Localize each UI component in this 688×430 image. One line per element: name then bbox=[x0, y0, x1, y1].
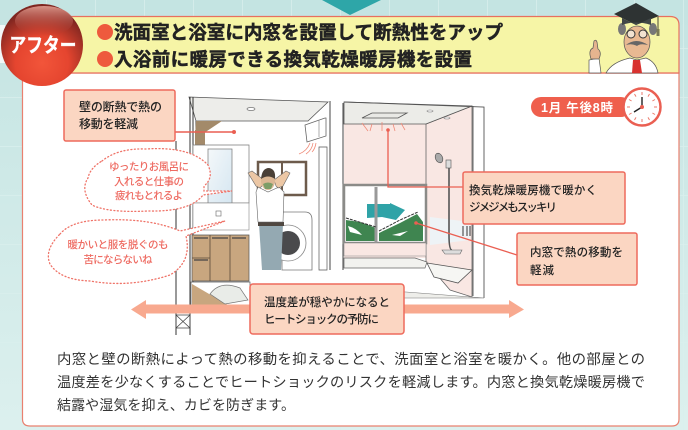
heading: header points bbox=[97, 22, 503, 70]
callout: ventilation heater bbox=[386, 128, 625, 224]
badge: after bbox=[1, 4, 83, 86]
callout: inner window bbox=[414, 221, 637, 285]
speech bubble: warm when undressing: 暖かいと服を脱ぐのも bbox=[68, 238, 168, 251]
callout: heat shock prevention: ヒートショックの予防に bbox=[264, 312, 379, 326]
text block: description: 内窓と壁の断熱によって熱の移動を抑えることで、洗面室と浴室を暖かく。他の部屋との bbox=[57, 351, 645, 368]
callout: wall insulation: 壁の断熱で熱の bbox=[79, 99, 162, 114]
callout: heat shock prevention: 温度差が穏やかになると bbox=[264, 295, 390, 309]
illustration: washroom and bathroom cross-section bbox=[176, 97, 484, 335]
speech bubble: relaxing bath: 疲れもとれるよ bbox=[115, 189, 183, 202]
arrow: temperature difference two-way arrow bbox=[131, 300, 524, 319]
text block: description: 結露や湿気を抑え、カビを防ぎます。 bbox=[57, 397, 295, 413]
callout: ventilation heater: ジメジメもスッキリ bbox=[469, 201, 557, 214]
badge: after: アフター bbox=[10, 34, 76, 57]
callout: wall insulation bbox=[64, 90, 236, 141]
callout: inner window: 軽減 bbox=[530, 263, 554, 277]
clock label: January 8pm: 1月 午後8時 bbox=[541, 100, 613, 115]
icon: clock bbox=[624, 88, 660, 126]
speech bubble: relaxing bath: 入れると仕事の bbox=[114, 175, 184, 188]
panel: yellow header band bbox=[60, 16, 679, 73]
icon: professor character bbox=[589, 3, 660, 73]
callout: heat shock prevention bbox=[250, 284, 404, 334]
text block: description: 温度差を少なくすることでヒートショックのリスクを軽減します。内窓と換気乾燥暖房機で bbox=[57, 374, 645, 391]
illustration: bathroom bbox=[344, 102, 484, 298]
heading: header points: 入浴前に暖房できる換気乾燥暖房機を設置 bbox=[114, 49, 472, 70]
heading: header points: 洗面室と浴室に内窓を設置して断熱性をアップ bbox=[114, 22, 503, 43]
illustration: washroom bbox=[176, 97, 343, 335]
speech bubble: warm when undressing bbox=[48, 220, 225, 283]
text block: description bbox=[57, 351, 645, 413]
clock label: January 8pm bbox=[531, 88, 660, 126]
speech bubble: relaxing bath: ゆったりお風呂に bbox=[109, 161, 189, 173]
icon: teal arrow at top edge bbox=[322, 0, 381, 15]
callout: wall insulation: 移動を軽減 bbox=[79, 116, 138, 131]
panel: main white panel bbox=[22, 73, 679, 426]
callout: inner window: 内窓で熱の移動を bbox=[530, 245, 623, 259]
speech bubble: relaxing bath bbox=[85, 149, 232, 211]
callout: ventilation heater: 換気乾燥暖房機で暖かく bbox=[469, 183, 597, 197]
speech bubble: warm when undressing: 苦にならないね bbox=[84, 253, 153, 266]
